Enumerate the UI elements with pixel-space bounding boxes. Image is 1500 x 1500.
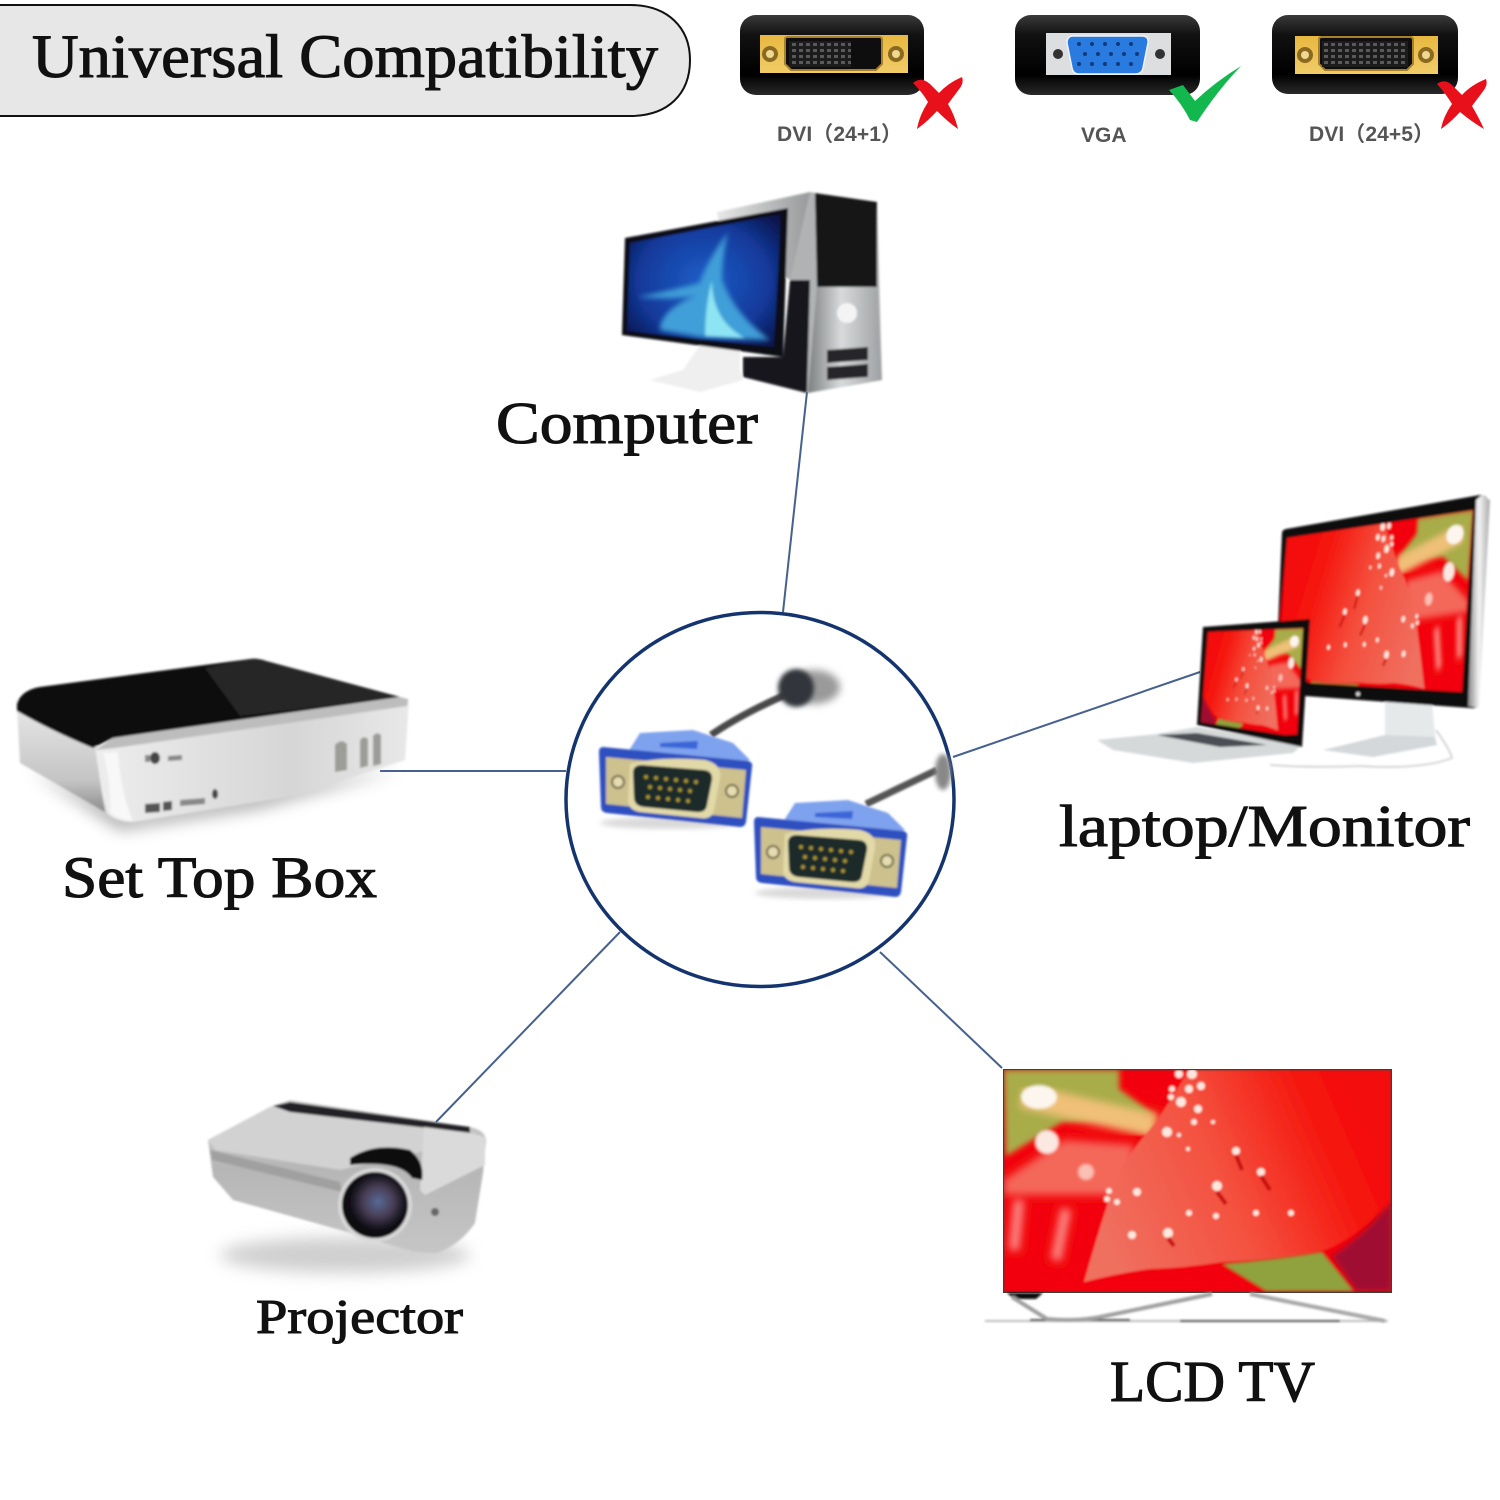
cable: lower bbox=[866, 754, 951, 804]
icon: laptop and monitor bbox=[1097, 495, 1490, 767]
connector: lower VGA plug bbox=[754, 800, 907, 899]
icon: LCD TV bbox=[985, 1069, 1392, 1321]
label: Projector: Projector bbox=[256, 1289, 463, 1344]
monitor bbox=[1270, 495, 1490, 767]
icon: red cross bbox=[1437, 79, 1487, 129]
connector: upper VGA plug bbox=[599, 730, 752, 829]
cable: upper bbox=[711, 669, 840, 735]
icon: projector bbox=[208, 1100, 486, 1273]
icon: green check bbox=[1169, 66, 1241, 122]
title text: Universal Compatibility bbox=[32, 24, 659, 91]
laptop bbox=[1097, 619, 1310, 763]
icon: red cross bbox=[913, 77, 963, 129]
TV stand bbox=[985, 1293, 1388, 1321]
label: LCD TV: LCD TV bbox=[1110, 1349, 1315, 1414]
connector: DVI 24+5 bbox=[1272, 15, 1487, 129]
label: Set Top Box: Set Top Box bbox=[62, 845, 377, 910]
connector lines bbox=[380, 392, 1200, 1122]
label: VGA: VGA bbox=[1081, 124, 1127, 147]
connector: DVI 24+1 bbox=[740, 15, 963, 129]
label: laptop/Monitor: laptop/Monitor bbox=[1059, 793, 1470, 859]
label: DVI 24+5: DVI（24+5） bbox=[1309, 123, 1434, 146]
label: Computer: Computer bbox=[496, 390, 758, 456]
icon: computer bbox=[622, 192, 882, 393]
icon: set top box bbox=[17, 659, 409, 830]
title badge bbox=[0, 5, 690, 116]
central VGA cable circle bbox=[566, 612, 954, 986]
connector: VGA bbox=[1015, 15, 1241, 122]
label: DVI 24+1: DVI（24+1） bbox=[777, 123, 902, 146]
